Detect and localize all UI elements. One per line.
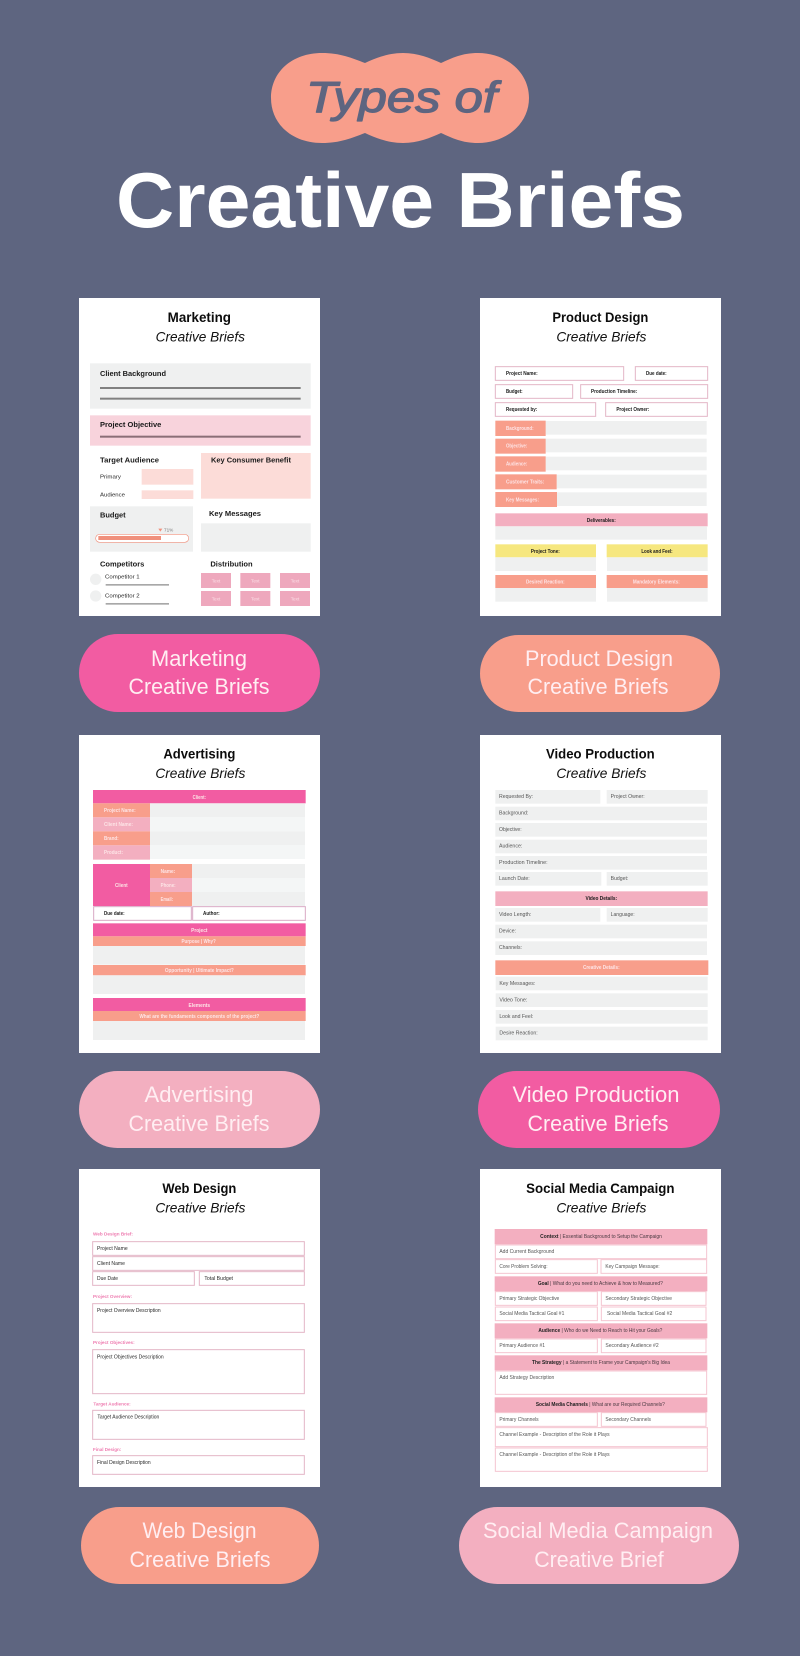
competitors: Competitor 2 — [105, 594, 140, 600]
key consumer benefit: Key Consumer Benefit — [211, 456, 291, 465]
client contact table — [93, 864, 305, 906]
panel title — [546, 745, 655, 781]
panel: product design creative brief — [480, 298, 721, 616]
key messages — [201, 509, 311, 552]
project fields: Budget: — [611, 876, 628, 882]
web design brief fields: Web Design Brief: — [93, 1232, 133, 1238]
elements section: Elements — [188, 1003, 210, 1009]
pill: social media campaign: Social Media Campaign — [483, 1518, 713, 1543]
creative details: Key Messages: — [499, 981, 535, 987]
competitors — [90, 560, 169, 605]
goal section: Social Media Tactical Goal #2 — [607, 1311, 672, 1317]
project info fields: Due date: — [646, 371, 667, 377]
elements section — [93, 998, 306, 1040]
project info fields: Requested by: — [506, 407, 538, 413]
audience section — [495, 1323, 707, 1353]
panel title: Video Production — [546, 745, 655, 761]
pill: advertising: Advertising — [144, 1082, 254, 1107]
audience section: Secondary Audience #2 — [605, 1343, 659, 1349]
target audience: Target Audience: — [93, 1402, 131, 1408]
panel title — [156, 309, 245, 345]
goal section: Primary Strategic Objective — [499, 1296, 559, 1302]
project objectives: Project Objectives Description — [97, 1354, 164, 1360]
panel title: Creative Briefs — [556, 1201, 646, 1216]
labelled rows: Customer Traits: — [506, 479, 545, 485]
panel: web design creative brief — [79, 1169, 320, 1487]
social media channels section: Primary Channels — [499, 1417, 539, 1423]
strategy section: The Strategy | a Statement to Frame your Campaign's Big Idea — [532, 1360, 670, 1366]
distribution grid — [201, 559, 310, 606]
project objectives — [93, 1340, 304, 1394]
project overview: Project Overview Description — [97, 1308, 161, 1314]
target audience: Target Audience Description — [97, 1415, 159, 1421]
panel title: Advertising — [163, 745, 235, 761]
social media channels section: Secondary Channels — [605, 1417, 651, 1423]
blob badge: Types of: Types of — [306, 73, 502, 122]
desired reaction: Desired Reaction: — [526, 580, 565, 586]
project objective: Project Objective — [100, 420, 161, 429]
deliverables — [495, 513, 708, 540]
client table — [93, 790, 306, 860]
pill: advertising: Creative Briefs — [128, 1111, 270, 1136]
client table: Project Name: — [104, 808, 136, 814]
web design brief fields: Client Name — [97, 1261, 125, 1267]
mandatory elements: Mandatory Elements: — [633, 580, 680, 586]
pill: product design: Product Design — [525, 646, 673, 671]
client contact table: Name: — [161, 869, 176, 875]
project section: Purpose | Why? — [181, 939, 216, 945]
labelled rows: Objective: — [506, 444, 528, 450]
distribution grid: Text — [212, 579, 221, 584]
labelled rows — [495, 421, 707, 507]
title banner — [116, 53, 685, 244]
final design — [93, 1447, 304, 1474]
panel: video production creative brief — [480, 735, 721, 1053]
project section: Opportunity | Ultimate Impact? — [165, 968, 234, 974]
project fields: Requested By: — [499, 794, 533, 800]
project section: Project — [191, 928, 208, 934]
social media channels section — [495, 1397, 707, 1471]
client contact table: Client — [115, 883, 128, 889]
pill: advertising — [79, 1071, 320, 1148]
labelled rows: Audience: — [506, 461, 528, 467]
look and feel: Look and Feel: — [641, 549, 673, 555]
web design brief fields: Total Budget — [204, 1276, 233, 1282]
project overview: Project Overview: — [93, 1294, 132, 1300]
competitors: Competitor 1 — [105, 575, 140, 581]
pill: product design — [480, 635, 720, 712]
panel title: Social Media Campaign — [526, 1180, 674, 1196]
target audience: Audience — [100, 493, 125, 499]
project fields: Objective: — [499, 827, 522, 833]
panel: marketing creative brief — [79, 298, 320, 616]
creative details — [495, 960, 708, 1040]
panel: advertising creative brief — [79, 735, 320, 1053]
goal section: Goal | What do you need to Achieve & how to Measured? — [538, 1281, 663, 1287]
video details: Channels: — [499, 945, 522, 951]
panel title: Creative Briefs — [556, 766, 646, 781]
project fields — [495, 790, 708, 886]
pill: product design: Creative Briefs — [528, 674, 668, 699]
panel title — [552, 309, 648, 345]
web design brief fields: Due Date — [97, 1276, 118, 1282]
project info fields: Production Timeline: — [591, 389, 638, 395]
project info fields: Project Owner: — [616, 407, 650, 413]
due date and author: Author: — [203, 911, 220, 917]
audience section: Primary Audience #1 — [499, 1343, 545, 1349]
client table: Product: — [104, 850, 123, 856]
distribution grid: Text — [291, 579, 300, 584]
project section — [93, 923, 306, 994]
project fields: Background: — [499, 811, 528, 817]
distribution grid: Text — [251, 579, 260, 584]
project fields: Launch Date: — [499, 876, 530, 882]
blob badge: Types of — [271, 53, 529, 143]
desired reaction — [495, 575, 596, 602]
pill: marketing — [79, 634, 320, 712]
goal section: Social Media Tactical Goal #1 — [499, 1311, 564, 1317]
project tone — [495, 544, 596, 571]
context section: Add Current Background — [499, 1249, 554, 1255]
creative details: Creative Details: — [583, 965, 620, 971]
look and feel — [607, 544, 708, 571]
project fields: Audience: — [499, 843, 522, 849]
pill: marketing: Creative Briefs — [128, 674, 270, 699]
due date and author: Due date: — [104, 911, 125, 917]
client table: Brand: — [104, 836, 119, 842]
context section — [495, 1229, 707, 1273]
distribution grid: Text — [212, 597, 221, 602]
final design: Final Design: — [93, 1447, 122, 1453]
labelled rows: Key Messages: — [506, 497, 539, 503]
panel title: Creative Briefs — [556, 330, 646, 345]
pill: marketing: Marketing — [151, 646, 247, 671]
mandatory elements — [607, 575, 708, 602]
client background — [90, 363, 311, 409]
budget progress bar: 71% — [164, 528, 173, 533]
goal section: Secondary Strategic Objective — [605, 1296, 672, 1302]
context section: Context | Essential Background to Setup the Campaign — [540, 1234, 662, 1240]
project tone: Project Tone: — [531, 549, 560, 555]
panel title — [155, 745, 245, 781]
target audience: Target Audience — [100, 456, 159, 465]
target audience — [100, 456, 193, 499]
pill: video production — [478, 1071, 720, 1148]
labelled rows: Background: — [506, 426, 534, 432]
client table: Client Name: — [104, 822, 133, 828]
pill: web design — [81, 1507, 319, 1584]
creative details: Look and Feel: — [499, 1014, 533, 1020]
project info fields — [495, 367, 708, 416]
project fields: Production Timeline: — [499, 860, 548, 866]
panel title: Product Design — [552, 309, 648, 325]
client contact table: Phone: — [161, 883, 176, 889]
panel title — [526, 1180, 674, 1216]
key messages: Key Messages — [209, 509, 261, 518]
main heading: Creative Briefs — [116, 156, 685, 244]
strategy section: Add Strategy Description — [499, 1375, 554, 1381]
pill: social media campaign — [459, 1507, 739, 1584]
budget progress bar — [90, 506, 193, 552]
distribution grid: Distribution — [210, 559, 253, 568]
distribution grid: Text — [251, 597, 260, 602]
target audience: Primary — [100, 475, 121, 481]
pill: web design: Web Design — [142, 1518, 256, 1543]
context section: Core Problem Solving: — [499, 1264, 548, 1270]
pill: web design: Creative Briefs — [130, 1547, 270, 1572]
video details: Video Details: — [585, 896, 617, 902]
audience section: Audience | Who do we Need to Reach to Hit your Goals? — [538, 1328, 662, 1334]
video details: Language: — [611, 912, 635, 918]
client contact table: Email: — [161, 897, 173, 903]
project info fields: Project Name: — [506, 371, 538, 377]
deliverables: Deliverables: — [587, 518, 616, 524]
distribution grid: Text — [291, 597, 300, 602]
panel title: Creative Briefs — [156, 330, 245, 345]
project objectives: Project Objectives: — [93, 1340, 135, 1346]
pill: video production: Creative Briefs — [528, 1111, 668, 1136]
panel title — [155, 1180, 245, 1216]
panel title: Creative Briefs — [155, 766, 245, 781]
panel title: Web Design — [162, 1180, 236, 1196]
final design: Final Design Description — [97, 1460, 151, 1466]
web design brief fields: Project Name — [97, 1246, 128, 1252]
social media channels section: Channel Example - Description of the Role it Plays — [499, 1452, 610, 1458]
client background: Client Background — [100, 369, 166, 378]
context section: Key Campaign Message: — [605, 1264, 660, 1270]
panel: social media campaign creative brief — [480, 1169, 721, 1487]
budget progress bar: Budget — [100, 510, 126, 519]
pill: social media campaign: Creative Brief — [534, 1547, 665, 1572]
pill: video production: Video Production — [512, 1082, 680, 1107]
target audience — [93, 1402, 304, 1439]
video details: Video Length: — [499, 912, 531, 918]
panel title: Creative Briefs — [155, 1201, 245, 1216]
social media channels section: Channel Example - Description of the Role it Plays — [499, 1432, 610, 1438]
due date and author — [94, 907, 305, 920]
video details — [495, 891, 708, 955]
key consumer benefit — [201, 453, 311, 499]
competitors: Competitors — [100, 560, 144, 569]
project fields: Project Owner: — [611, 794, 645, 800]
elements section: What are the fundaments components of the project? — [139, 1014, 259, 1020]
panel title: Marketing — [168, 309, 231, 325]
strategy section — [495, 1355, 707, 1394]
creative details: Desire Reaction: — [499, 1031, 538, 1037]
project info fields: Budget: — [506, 389, 523, 395]
social media channels section: Social Media Channels | What are our Required Channels? — [536, 1402, 665, 1408]
project objective — [90, 415, 311, 446]
video details: Device: — [499, 929, 516, 935]
creative details: Video Tone: — [499, 997, 527, 1003]
web design brief fields — [93, 1232, 304, 1285]
project overview — [93, 1294, 304, 1332]
client table: Client: — [193, 795, 206, 801]
goal section — [495, 1276, 707, 1321]
